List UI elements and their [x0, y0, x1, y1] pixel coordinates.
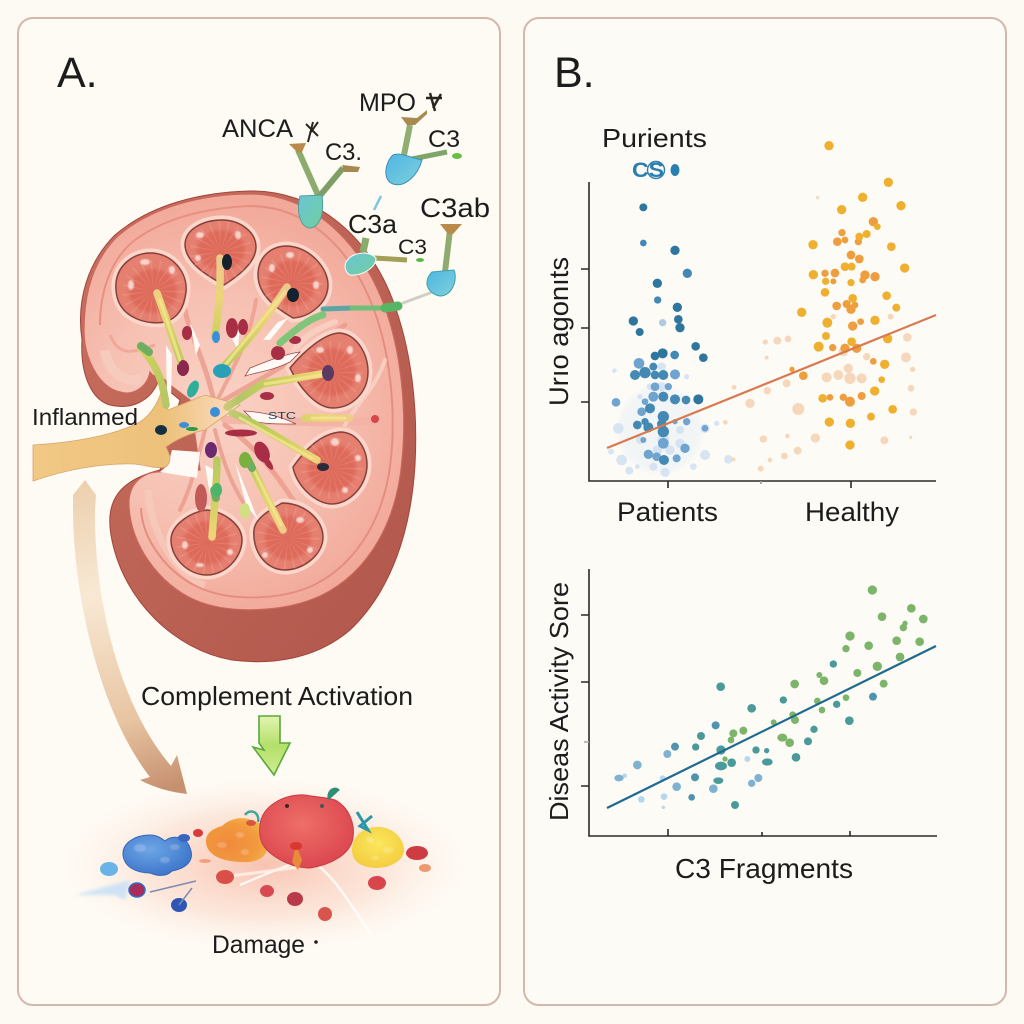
- chart: disease activity vs C3 fragments: [544, 569, 937, 884]
- big curved arrow from ureter to damage: [73, 480, 187, 794]
- labels: antibodies and fragments: MPO: [359, 89, 416, 117]
- series marker: C3: CS: [632, 159, 664, 182]
- labels: antibodies and fragments: ANCA: [222, 115, 293, 143]
- labels: antibodies and fragments: C3: [428, 126, 460, 153]
- lobe centres: [129, 230, 356, 565]
- cell textures: [134, 832, 393, 863]
- y-axis title: Urıo agonıts: [544, 257, 574, 406]
- label: Damage: Damage: [212, 931, 305, 959]
- points: patients: [608, 203, 733, 477]
- axes: [581, 569, 937, 836]
- antibody: ANCA: [289, 122, 360, 228]
- blue cell: [123, 835, 191, 875]
- label: Inflanmed: Inflanmed: [32, 404, 138, 430]
- ureter and renal pelvis: [33, 385, 240, 481]
- tubule end markers: [155, 254, 379, 519]
- labels: antibodies and fragments: C3.: [325, 139, 362, 166]
- lobes: [116, 220, 368, 575]
- heading: B: B.: [554, 49, 595, 97]
- panel: B: [524, 18, 1006, 1005]
- y-axis title: Diseas Activity Sore: [544, 582, 574, 821]
- small particles: [100, 829, 431, 921]
- points: healthy: [723, 141, 917, 472]
- trend line: [607, 315, 936, 448]
- x label: C3 Fragments: C3 Fragments: [675, 853, 853, 884]
- points: [614, 585, 928, 809]
- damage cluster: [60, 777, 470, 953]
- damage label mark: [314, 940, 318, 944]
- lobe radial rays: [136, 235, 349, 560]
- renal sinus openings: [244, 352, 300, 424]
- antibody: MPO: [374, 93, 462, 210]
- series label: Purients: Purients: [602, 123, 707, 153]
- panel: A: [18, 18, 500, 1005]
- lobe highlights: [128, 231, 361, 567]
- orange cell: [206, 818, 268, 862]
- labels: antibodies and fragments: [222, 89, 490, 259]
- labels: antibodies and fragments: C3a: [348, 209, 398, 239]
- lobe halos: [116, 220, 368, 575]
- antibody: C3a: [345, 238, 424, 275]
- label: Complement Activation: Complement Activation: [141, 681, 413, 711]
- dark red calyces: [177, 318, 301, 512]
- central unreadable mark: STC: [268, 411, 296, 422]
- series marker: C3: [632, 159, 680, 182]
- cell surface details: [245, 788, 372, 870]
- green down arrow: [253, 716, 290, 775]
- tubule outlet crossing the capsule: [280, 293, 430, 343]
- medulla streaks: [180, 300, 385, 510]
- heading: A: A.: [57, 49, 98, 97]
- trend line: [607, 646, 936, 808]
- kidney outer capsule: [80, 191, 416, 662]
- kidney pink cortex: [84, 194, 404, 610]
- yellow cell: [352, 827, 404, 868]
- cortex inner rims: [100, 206, 393, 597]
- renal sinus gaps: [160, 318, 288, 520]
- antibody: C3ab: [427, 224, 462, 296]
- labels: antibodies and fragments: C3: [398, 236, 427, 259]
- tubules: [140, 258, 350, 537]
- labels: antibodies and fragments: C3ab: [420, 193, 490, 223]
- red cell: [260, 795, 353, 868]
- x label: Patients: Patients: [617, 497, 718, 527]
- kidney: [33, 191, 430, 662]
- x label: Healthy: Healthy: [805, 497, 900, 527]
- axes: [581, 182, 936, 488]
- inflammation glow: [60, 777, 470, 953]
- chart: Patients vs Healthy scatter: [544, 123, 936, 527]
